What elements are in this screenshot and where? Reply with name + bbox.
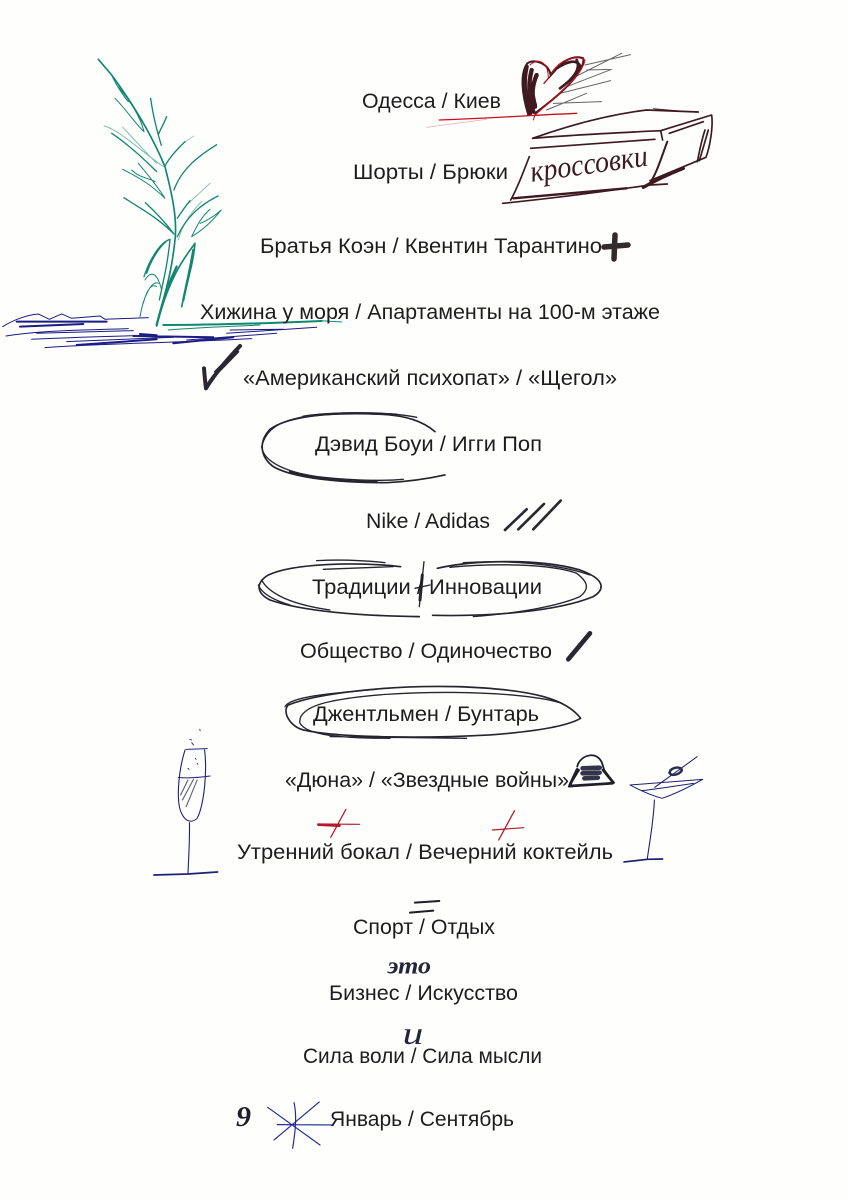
icon: martini glass with olive <box>624 757 703 862</box>
handwritten number 9: 9 <box>236 1101 251 1133</box>
line 16: Январь / Сентябрь <box>330 1108 514 1131</box>
line 9: Общество / Одиночество <box>300 640 552 663</box>
line 7: Nike / Adidas <box>366 510 490 533</box>
icon: check mark <box>204 346 240 388</box>
icon: equals sign <box>410 901 439 913</box>
line 5: «Американский психопат» / «Щегол» <box>243 367 617 390</box>
handwritten word on box: кроссовки <box>528 139 650 189</box>
line 13: Спорт / Отдых <box>353 916 495 939</box>
icon: sneaker box labelled кроссовки <box>503 109 712 203</box>
icon: red crosses above morning glass and evening cocktail <box>318 809 524 840</box>
handwritten word: это: это <box>387 953 431 979</box>
icon: red and dark heart with hatching <box>427 53 631 127</box>
line 12: Утренний бокал / Вечерний коктейль <box>237 841 613 864</box>
text: list of paired choices <box>200 90 660 1131</box>
line 10: Джентльмен / Бунтарь <box>313 703 539 726</box>
icon: Darth Vader helmet doodle <box>569 755 613 787</box>
line 2: Шорты / Брюки <box>353 161 508 184</box>
icon: three slashes <box>505 501 561 530</box>
icon: double oval with cross around Traditions / Innovations <box>258 560 601 617</box>
icon: bold cross after Tarantino <box>604 235 628 259</box>
icon: open oval around David Bowie <box>262 413 445 483</box>
line 14: Бизнес / Искусство <box>329 982 518 1005</box>
icon: green plant on blue shore <box>3 59 342 348</box>
line 8: Традиции / Инновации <box>312 576 542 599</box>
line 3: Братья Коэн / Квентин Тарантино <box>260 235 602 258</box>
icon: blue asterisk star <box>268 1102 332 1148</box>
icon: champagne flute <box>154 729 217 875</box>
line 4: Хижина у моря / Апартаменты на 100-м этаже <box>200 301 660 324</box>
handwritten letter: и: и <box>403 1015 423 1051</box>
line 11: «Дюна» / «Звездные войны» <box>285 769 569 792</box>
line 6: Дэвид Боуи / Игги Поп <box>315 433 542 456</box>
icon: oval around Gentleman / Rebel <box>285 686 581 738</box>
line 15: Сила воли / Сила мысли <box>303 1045 542 1068</box>
line 1: Одесса / Киев <box>362 90 501 113</box>
icon: thick slash <box>568 633 590 659</box>
